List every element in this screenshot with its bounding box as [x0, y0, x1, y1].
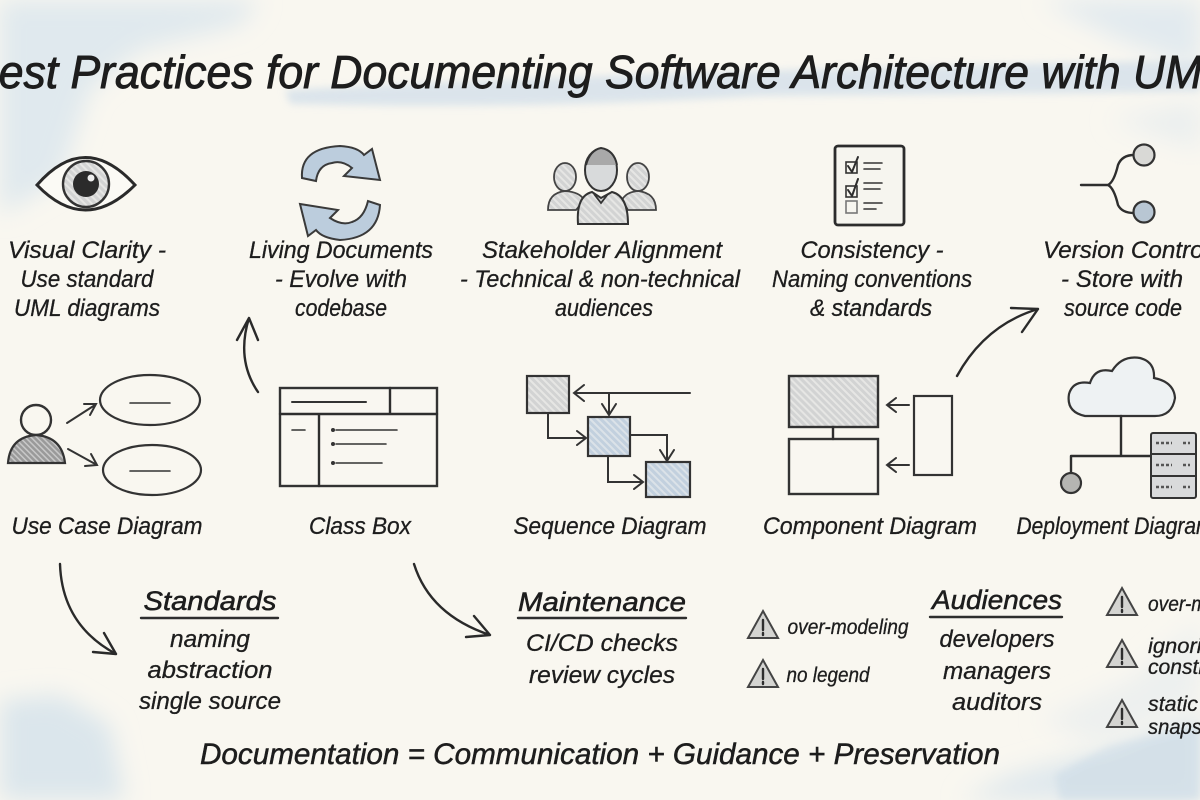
icon: version branch [1081, 144, 1154, 222]
standards block: naming [170, 626, 251, 653]
text: consistency: Naming conventions [772, 266, 972, 293]
warning: no legend [748, 660, 871, 687]
text: visual clarity: Visual Clarity - [8, 237, 166, 264]
text: version control: - Store with [1061, 266, 1183, 293]
text: living documents [249, 237, 433, 322]
warning: over-modeling right [1107, 588, 1200, 616]
text: version control: source code [1064, 295, 1182, 322]
text: visual clarity [8, 237, 166, 322]
icon: refresh arrows [300, 146, 380, 240]
maintenance block: CI/CD checks [526, 630, 678, 657]
diagram labels: Use Case Diagram [12, 513, 202, 540]
icon: checklist [835, 146, 904, 225]
warning: ignoring constraints [1107, 635, 1200, 679]
text: visual clarity: UML diagrams [14, 295, 160, 322]
diagram labels: Sequence Diagram [514, 513, 706, 540]
warning: static snapshots: static [1148, 693, 1199, 716]
icon: sequence diagram [527, 376, 690, 497]
arrow: class box to living documents [237, 318, 258, 392]
maintenance block [518, 587, 686, 689]
diagram labels: Class Box [309, 513, 412, 540]
text: stakeholder alignment: - Technical & non-technical [460, 266, 741, 293]
audiences block: auditors [952, 689, 1042, 716]
standards block: Standards [144, 586, 276, 616]
text: stakeholder alignment: Stakeholder Alignment [482, 237, 723, 264]
text: living documents: Living Documents [249, 237, 433, 264]
audiences block: developers [940, 626, 1054, 653]
maintenance block: Maintenance [518, 587, 686, 617]
standards block: single source [139, 688, 281, 715]
icon: use case diagram [8, 375, 201, 495]
warning: over-modeling: over-modeling [788, 616, 909, 639]
text: consistency: & standards [810, 295, 932, 322]
text: visual clarity: Use standard [20, 266, 154, 293]
text: consistency [772, 237, 972, 322]
standards block: abstraction [148, 657, 272, 684]
diagram labels: Component Diagram [763, 513, 977, 540]
diagram labels [12, 513, 1200, 540]
text: living documents: codebase [295, 295, 387, 322]
bottom formula: Documentation = Communication + Guidance + Preservation [200, 738, 1000, 771]
text: stakeholder alignment: audiences [555, 295, 653, 322]
text: version control [1043, 237, 1200, 322]
standards block [139, 586, 281, 715]
arrow: use case to standards [60, 564, 116, 654]
warning: over-modeling [748, 611, 909, 639]
warning: static snapshots [1107, 693, 1200, 739]
audiences block: managers [943, 658, 1051, 685]
icon: class box [280, 388, 437, 486]
icon: deployment cloud [1061, 358, 1196, 498]
warning: no legend: no legend [786, 664, 871, 687]
text: stakeholder alignment [460, 237, 741, 322]
maintenance block: review cycles [529, 662, 675, 689]
icon: eye [37, 158, 135, 210]
icon: stakeholders [548, 148, 656, 224]
text: living documents: - Evolve with [275, 266, 407, 293]
text: consistency: Consistency - [800, 237, 944, 264]
icon: component diagram [789, 376, 952, 494]
arrow: component to version control [957, 308, 1038, 376]
audiences block: Audiences [930, 585, 1062, 615]
audiences block [930, 585, 1062, 716]
arrow: class box to maintenance [414, 564, 490, 637]
